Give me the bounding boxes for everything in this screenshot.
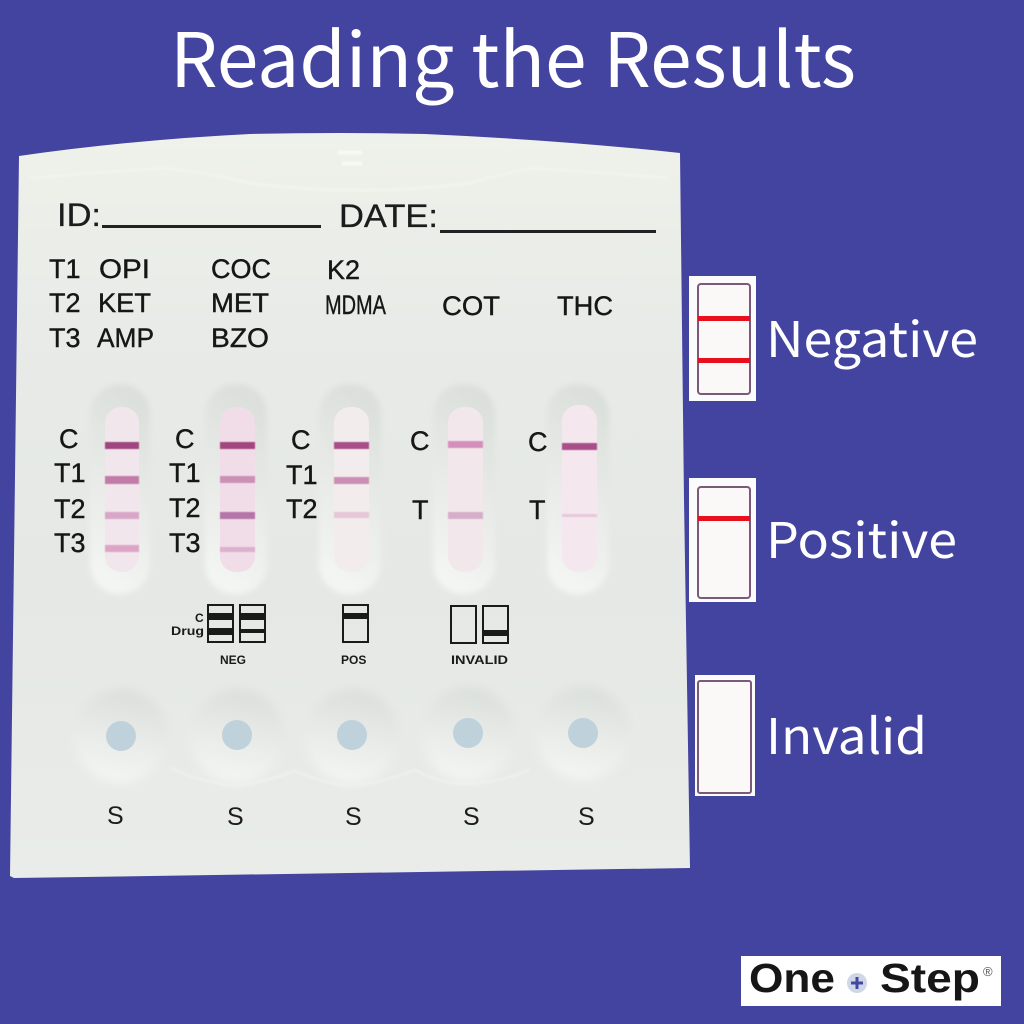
ID and date fields: ID:: [57, 197, 101, 233]
strip letter labels: C: [410, 426, 430, 456]
drug labels: MET: [211, 288, 269, 318]
test strip 1: [105, 407, 139, 572]
test strip 2: [220, 407, 255, 572]
strip letter labels: [54, 424, 548, 558]
drug labels: AMP: [97, 323, 154, 353]
strip letter labels: C: [528, 427, 548, 457]
strip letter labels: T2: [286, 494, 318, 524]
strip letter labels: T: [412, 495, 428, 525]
drug labels: MDMA: [325, 290, 386, 320]
drug labels: [49, 254, 613, 353]
positive diagram: [689, 478, 756, 602]
drug labels: KET: [98, 288, 151, 318]
result key: INVALID: [451, 606, 508, 667]
cassette body: [10, 133, 690, 878]
drug labels: T2: [49, 288, 81, 318]
sample labels: [107, 802, 595, 831]
drug labels: COT: [442, 291, 500, 321]
result key: NEG: Drug: [171, 624, 204, 638]
invalid diagram: [695, 675, 755, 796]
drug labels: COC: [211, 254, 271, 284]
drug labels: K2: [327, 255, 360, 285]
ID and date fields: DATE:: [339, 198, 438, 234]
sample labels: S: [107, 802, 124, 830]
icon: plus: [847, 973, 867, 993]
drug labels: THC: [557, 291, 613, 321]
slot halos: [90, 384, 609, 594]
sample labels: S: [227, 803, 244, 831]
drug labels: T3: [49, 323, 81, 353]
label: Invalid: Invalid: [766, 698, 927, 769]
drug labels: BZO: [211, 323, 269, 353]
ID and date fields: [57, 197, 656, 234]
strip letter labels: T: [529, 495, 546, 525]
logo: One Step: [741, 955, 1001, 1006]
test strip 5: [562, 405, 597, 572]
strip letter labels: T1: [286, 460, 318, 490]
strip letter labels: T3: [169, 528, 201, 558]
sample wells: [74, 686, 630, 786]
logo: One Step: ®: [983, 964, 993, 979]
strip letter labels: T1: [54, 458, 86, 488]
title: Reading the Results: [170, 0, 856, 109]
result key: NEG: NEG: [220, 653, 246, 667]
strip letter labels: T3: [54, 528, 86, 558]
strip letter labels: T2: [169, 493, 201, 523]
logo: One Step: One: [749, 955, 835, 1001]
sample labels: S: [345, 803, 362, 831]
result key: NEG: [171, 605, 265, 667]
strip letter labels: C: [291, 425, 310, 455]
result key: NEG: C: [195, 611, 204, 625]
label: Positive: Positive: [766, 502, 957, 573]
test strip 4: [448, 407, 483, 572]
drug labels: OPI: [99, 254, 150, 284]
result key: POS: [341, 605, 368, 667]
result key: POS: POS: [341, 653, 366, 667]
sample labels: S: [578, 803, 595, 831]
result key: INVALID: INVALID: [451, 653, 508, 667]
label: Negative: Negative: [766, 301, 978, 372]
drug labels: T1: [49, 254, 81, 284]
test strip 3: [334, 407, 369, 572]
negative diagram: [689, 276, 756, 401]
strip letter labels: C: [59, 424, 78, 454]
strip letter labels: T1: [169, 458, 201, 488]
strip letter labels: T2: [54, 494, 86, 524]
sample labels: S: [463, 803, 480, 831]
strip letter labels: C: [175, 424, 194, 454]
panel: test cassette: [10, 133, 690, 878]
logo: One Step: Step: [880, 955, 980, 1001]
